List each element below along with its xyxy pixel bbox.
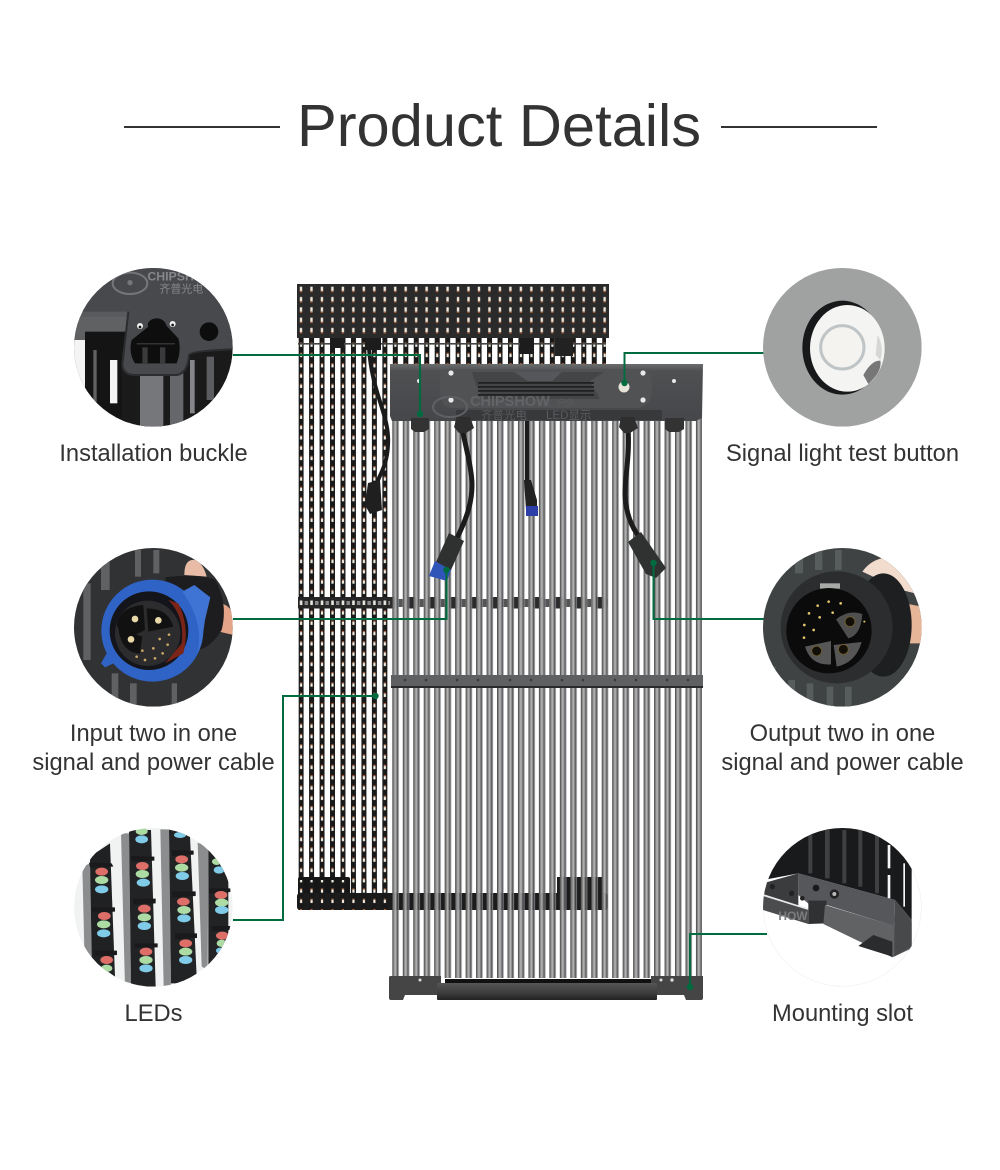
leader: signal button — [624, 353, 764, 383]
product: LED mesh screen — [297, 284, 703, 1000]
front cross bar — [391, 675, 703, 688]
leader: installation buckle — [233, 355, 420, 414]
screws — [417, 370, 676, 403]
rear bottom bar — [297, 877, 608, 910]
label: test button: Signal light test button — [726, 441, 959, 467]
photo: mounting slot — [763, 828, 922, 987]
brand logo mark — [433, 397, 467, 417]
panel: input cable — [32, 548, 275, 776]
front bottom rail — [389, 976, 703, 1000]
brand led text: LED显示 — [546, 409, 591, 422]
bottom shadow strip — [456, 410, 662, 420]
test button — [618, 382, 630, 392]
leader lines — [233, 353, 767, 987]
rear LED strips — [298, 338, 606, 910]
leader: mounting slot — [690, 934, 767, 987]
panel: installation buckle — [59, 268, 248, 467]
photo: installation buckle: CHIPSHOW — [147, 270, 216, 284]
photo: test button — [763, 268, 922, 427]
label: output cable: Output two in one — [750, 721, 935, 747]
brand outdoor text: 户外 — [557, 397, 575, 408]
rear signal cable — [365, 348, 388, 514]
panel: mounting slot — [763, 828, 922, 1027]
input cable — [429, 417, 474, 581]
middle loose cable — [524, 421, 538, 516]
output cable — [619, 417, 666, 578]
panel: signal light test button — [726, 268, 959, 467]
leader dots — [372, 380, 693, 990]
label: installation buckle: Installation buckle — [59, 441, 248, 467]
title text: Product Details — [297, 92, 701, 159]
panel: output cable — [721, 548, 964, 776]
photo: installation buckle — [74, 268, 233, 427]
title rule right — [721, 126, 877, 128]
rear panel: LED strips view — [297, 284, 609, 910]
center plate — [440, 369, 652, 408]
photo: RGB LEDs close-up — [74, 828, 233, 987]
panel: LEDs — [74, 828, 233, 1027]
rear LED top module — [297, 284, 609, 338]
leader: LEDs — [233, 696, 375, 920]
rear middle bar — [298, 597, 608, 608]
leader: input cable — [233, 570, 446, 619]
label: input cable: Input two in one — [70, 721, 237, 747]
heat sink vent — [472, 372, 604, 399]
photo: installation buckle: 齐普光电 — [159, 282, 203, 296]
hanging buckles — [411, 418, 684, 432]
label: input cable line two: signal and power cable — [32, 750, 275, 776]
title rule left — [124, 126, 280, 128]
leader: output cable — [654, 563, 764, 619]
front header box — [390, 364, 703, 422]
front panel: aluminium rods — [392, 418, 702, 978]
photo: mounting slot: HOW — [778, 909, 808, 923]
label: LEDs: LEDs — [125, 1001, 182, 1027]
photo: blue input connector — [74, 548, 233, 707]
brand name: CHIPSHOW — [470, 394, 550, 410]
brand chinese name: 齐普光电 — [481, 408, 527, 422]
photo: black output connector — [763, 548, 922, 707]
label: output cable line two: signal and power cable — [721, 750, 964, 776]
label: mounting slot: Mounting slot — [772, 1001, 913, 1027]
